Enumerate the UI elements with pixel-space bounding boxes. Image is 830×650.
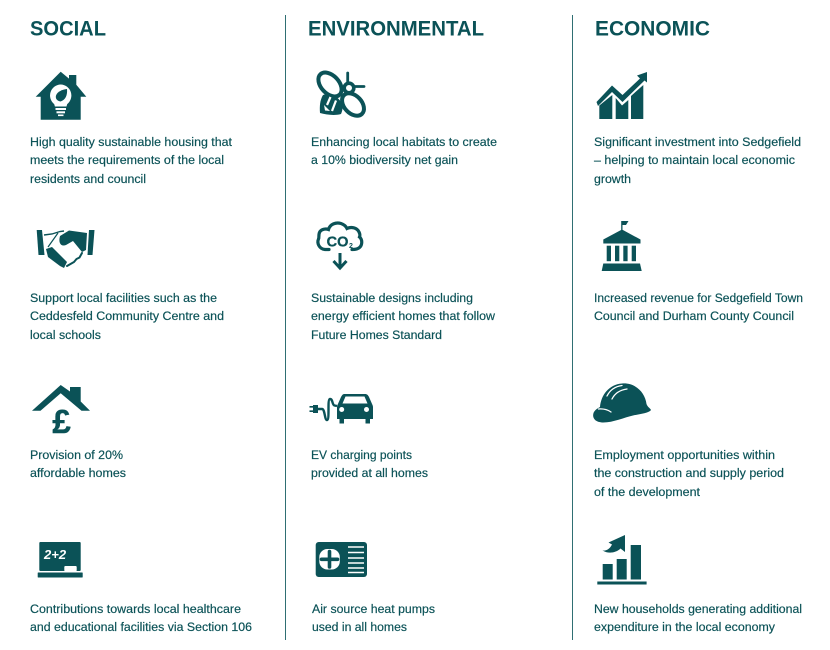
heading: economic: ECONOMIC [595,18,710,40]
icon: CO2 cloud with arrow: CO [327,234,348,250]
icon: CO2 cloud with arrow [318,223,362,268]
icon: house roof with pound sign [32,385,90,440]
icon: bar chart with arrow [597,535,647,584]
text: employment [594,448,784,499]
text: sustainable designs: Sustainable designs including [311,291,473,305]
text: housing [30,135,233,186]
icon: CO2 cloud with arrow: 2 [349,243,353,250]
text: EV charging: provided at all homes [311,466,428,480]
text: biodiversity: a 10% biodiversity net gain [311,153,458,167]
text: biodiversity [311,135,497,167]
icon: house with light bulb [36,72,86,120]
icon: chalkboard: 2+2 [43,547,67,562]
icon: handshake [37,230,94,268]
text: revenue: Increased revenue for Sedgefield Town [594,291,803,305]
text: housing: High quality sustainable housing that [30,135,233,149]
text: heat pumps: used in all homes [312,620,407,634]
text: local facilities: local schools [30,328,101,342]
heading: social: SOCIAL [30,18,106,40]
text: EV charging: EV charging points [311,448,412,462]
icon: electric car and plug [310,394,373,424]
text: housing: residents and council [30,172,146,186]
text: investment [594,135,801,186]
icon: rising chart [596,72,647,119]
icon: bee [314,68,368,120]
text: employment: Employment opportunities within [594,448,775,462]
icon: civic building with flag [602,221,642,271]
heading: environmental: ENVIRONMENTAL [308,18,484,40]
text: revenue: Council and Durham County Council [594,309,794,323]
text: sustainable designs: energy efficient homes that follow [311,309,495,323]
icon: hard hat [593,383,651,423]
text: households: expenditure in the local economy [594,620,776,634]
text: sustainable designs: Future Homes Standard [311,328,442,342]
icon: house roof with pound sign: £ [52,403,71,440]
text: local facilities: Ceddesfeld Community Centre and [30,309,224,323]
text: affordable homes: affordable homes [30,466,126,480]
text: sustainable designs [311,291,495,342]
text: affordable homes [30,448,126,480]
text: biodiversity: Enhancing local habitats to create [311,135,497,149]
text: investment: Significant investment into Sedgefield [594,135,801,149]
text: affordable homes: Provision of 20% [30,448,123,462]
text: investment: growth [594,172,631,186]
text: households [594,602,802,634]
text: EV charging [311,448,428,480]
text: investment: – helping to maintain local economic [594,153,795,167]
text: households: New households generating additional [594,602,802,616]
text: healthcare contributions: and educational facilities via Section 106 [30,620,252,634]
text: revenue [594,291,803,323]
text: employment: the construction and supply period [594,466,784,480]
text: healthcare contributions [30,602,252,634]
text: local facilities [30,291,224,342]
text: employment: of the development [594,485,701,499]
icon: air source heat pump [316,542,367,577]
text: local facilities: Support local facilities such as the [30,291,217,305]
icon: chalkboard [38,542,83,578]
text: healthcare contributions: Contributions towards local healthcare [30,602,241,616]
text: heat pumps [312,602,435,634]
text: heat pumps: Air source heat pumps [312,602,435,616]
text: housing: meets the requirements of the local [30,153,224,167]
